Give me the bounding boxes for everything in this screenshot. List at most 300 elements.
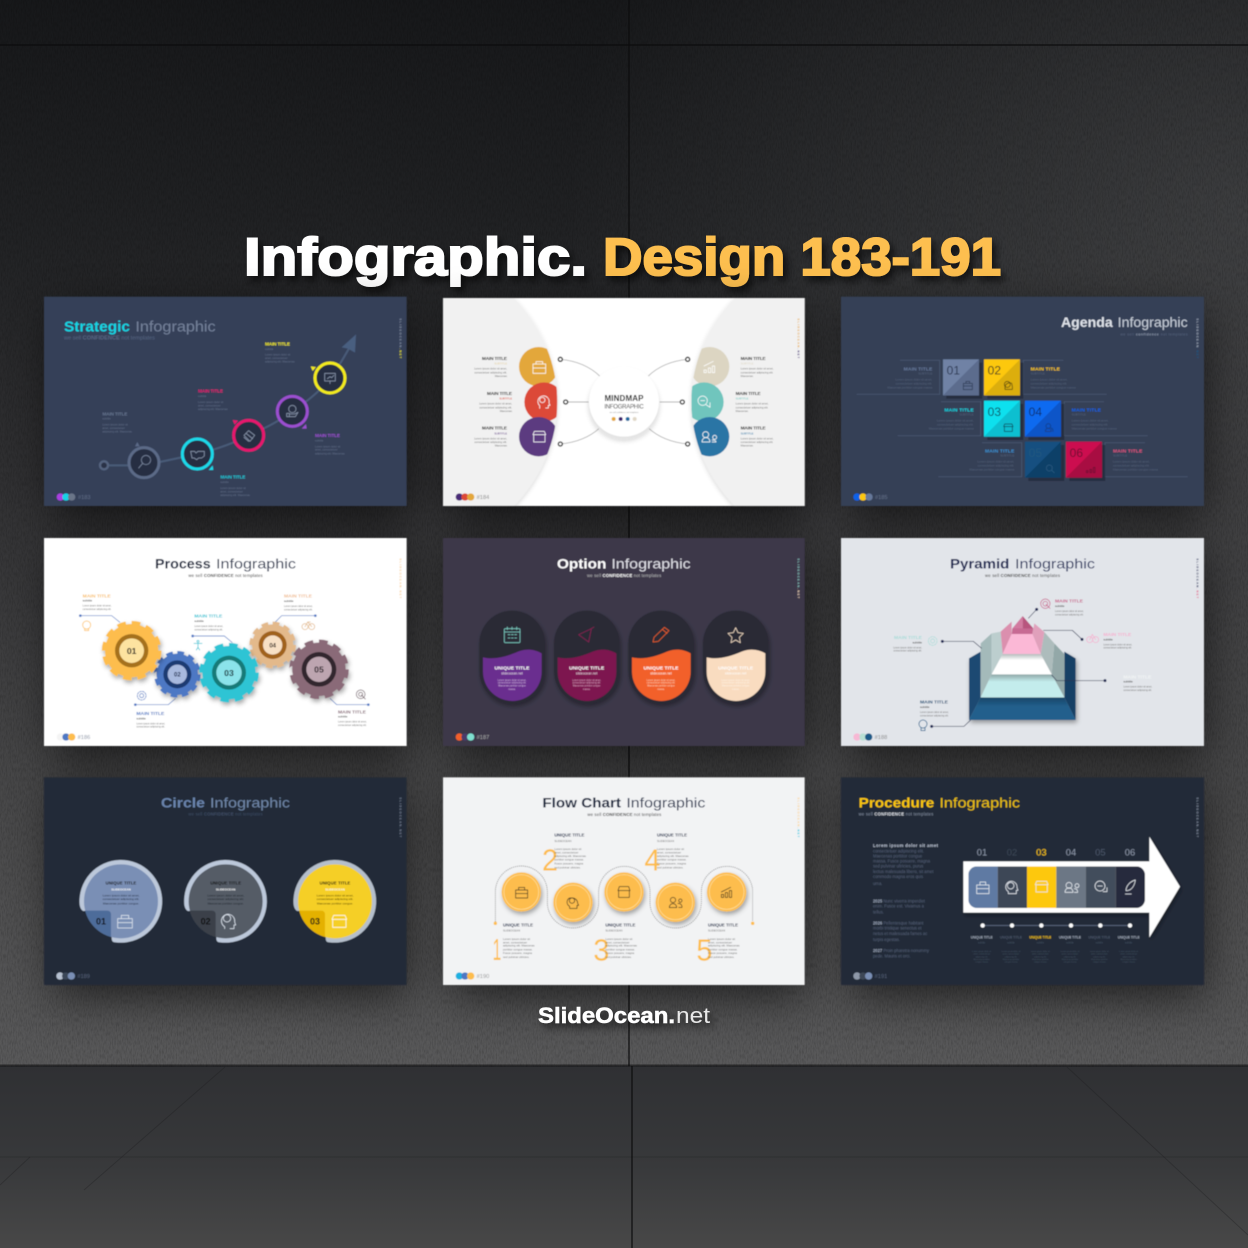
right labels: Lorem ipsum dolor sit amet, bbox=[736, 402, 769, 406]
text: step 4: SLIDEOCEAN bbox=[657, 839, 674, 843]
label 05: Lorem ipsum dolor sit amet, bbox=[978, 459, 1014, 463]
left labels: Maecenas bbox=[495, 444, 508, 448]
card 2 maroon bbox=[554, 611, 620, 704]
square 04 bbox=[1025, 401, 1064, 440]
label 01: MAIN TITLE bbox=[904, 366, 933, 372]
heading: procedure bbox=[859, 795, 1020, 817]
label 02 bbox=[136, 711, 165, 729]
left labels: Lorem ipsum dolor sit amet, bbox=[479, 402, 512, 406]
step labels: amet, consectetuer bbox=[973, 953, 990, 956]
heading: pyramid bbox=[950, 556, 1095, 578]
step labels bbox=[971, 936, 1140, 964]
centre circle: we sell confidence not templates bbox=[610, 411, 638, 414]
label blue: Lorem ipsum dolor sit amet, bbox=[920, 711, 949, 714]
label pink bbox=[1103, 632, 1132, 650]
left labels: MAIN TITLE bbox=[482, 356, 507, 361]
heading: circle: Infographic bbox=[210, 795, 290, 811]
label pink: consectetuer adipiscing elit. bbox=[1103, 647, 1132, 650]
left labels: consectetuer adipiscing elit. bbox=[479, 405, 512, 409]
label 02 bbox=[1031, 366, 1076, 390]
step labels: adipiscing elit. bbox=[975, 955, 988, 958]
heading: strategic bbox=[63, 319, 216, 341]
card 1 purple: Maecenas porttitor congue bbox=[498, 684, 526, 687]
side label: SLIDEOCEAN .NET bbox=[399, 318, 403, 359]
gear 03 bbox=[202, 646, 256, 699]
gear 03: 03 bbox=[224, 668, 234, 678]
card 3 orange: Maecenas porttitor congue bbox=[647, 684, 675, 687]
square 05 bbox=[1025, 442, 1064, 481]
label 01: consectetuer adipiscing elit. bbox=[896, 381, 932, 385]
label aqua bbox=[893, 635, 923, 653]
right circles bbox=[690, 346, 730, 457]
step labels: adipiscing elit. bbox=[1064, 955, 1077, 958]
side label: SLIDEOCEAN.NET bbox=[399, 558, 403, 599]
text: step 1: MAIN TITLE bbox=[102, 411, 127, 416]
text: step 2: sed pulvinar ultricies. bbox=[554, 865, 581, 869]
pyramid top bbox=[1012, 616, 1033, 634]
circle card 02: UNIQUE TITLE bbox=[210, 881, 241, 886]
text: step 1 bbox=[503, 922, 535, 959]
text: step 2: Fusce posuere, magna bbox=[554, 861, 584, 865]
text: step 3: adipiscing elit. Maecenas bbox=[198, 407, 228, 411]
circle card 03 bbox=[293, 860, 376, 943]
heading: option: Infographic bbox=[611, 556, 691, 572]
label top: consectetuer adipiscing elit. bbox=[1055, 613, 1084, 616]
text: step 5: SLIDEOCEAN bbox=[708, 929, 725, 933]
main title: Design 183-191 bbox=[603, 228, 1001, 287]
panel: option infographic 187 bbox=[443, 538, 805, 746]
legend 189 bbox=[56, 972, 90, 980]
label 06: MAIN TITLE bbox=[1113, 448, 1143, 454]
card 3 orange: UNIQUE TITLE bbox=[643, 665, 679, 671]
circle card 01: consectetuer adipiscing elit. bbox=[103, 897, 139, 901]
step numbers bbox=[977, 848, 1135, 858]
heading: flow chart: we sell CONFIDENCE not templates bbox=[587, 812, 661, 817]
text: step 1: adipiscing elit. Maecenas bbox=[503, 944, 535, 948]
heading: pyramid: we sell CONFIDENCE not templates bbox=[985, 573, 1060, 578]
text: step 3: adipiscing elit. Maecenas bbox=[605, 944, 638, 948]
label 01: consectetuer adipiscing elit. bbox=[83, 608, 112, 611]
label top bbox=[1055, 599, 1084, 616]
footer brand: SlideOcean. bbox=[538, 1003, 675, 1028]
left labels: SUBTITLE bbox=[494, 431, 507, 435]
label 04 bbox=[1072, 407, 1117, 431]
step labels: Lorem ipsum dolor sit bbox=[1119, 950, 1139, 953]
gear 05: 05 bbox=[314, 665, 324, 675]
step labels: amet, consectetuer bbox=[1003, 953, 1020, 956]
panel: process infographic 186 bbox=[44, 538, 407, 746]
label 01: Lorem ipsum dolor sit amet, bbox=[83, 605, 112, 608]
text: step 5: MAIN TITLE bbox=[265, 342, 290, 347]
label top: subtitle bbox=[1055, 604, 1065, 608]
icon: bulb bbox=[919, 720, 927, 731]
card 1 purple bbox=[479, 611, 545, 704]
step 2 node bbox=[182, 439, 212, 469]
label 03: Lorem ipsum dolor sit amet, bbox=[194, 625, 223, 628]
label 06: consectetuer adipiscing elit. bbox=[1113, 463, 1150, 467]
text: step 5 bbox=[265, 342, 295, 364]
text: step 2: SLIDEOCEAN bbox=[554, 839, 572, 843]
text: step 3 bbox=[605, 922, 638, 959]
step labels: amet, consectetuer bbox=[1062, 953, 1079, 956]
text: step 1: Lorem ipsum dolor sit bbox=[503, 937, 530, 941]
label 01: SUBTITLE bbox=[918, 372, 932, 376]
side label: SLIDEOCEAN.NET bbox=[399, 797, 403, 838]
label 05: MAIN TITLE bbox=[985, 448, 1015, 454]
card 4 peach: Maecenas porttitor congue bbox=[722, 684, 750, 687]
leader lines bbox=[932, 609, 1105, 726]
card 1 purple: massa. bbox=[508, 689, 516, 691]
label blue: consectetuer adipiscing elit. bbox=[920, 714, 949, 717]
gear 05 bbox=[292, 643, 346, 696]
legend 190 bbox=[456, 972, 489, 980]
text: step 3: sed pulvinar ultricies. bbox=[605, 955, 632, 959]
step labels: Maecenas porttitor bbox=[1120, 958, 1137, 961]
left circles bbox=[519, 347, 564, 456]
step labels: Maecenas porttitor bbox=[1062, 958, 1079, 961]
left labels: Maecenas bbox=[495, 374, 508, 378]
icons bbox=[533, 361, 717, 442]
text: step 2: subtitle bbox=[220, 480, 229, 484]
label 04: consectetuer adipiscing elit. bbox=[1072, 422, 1108, 426]
label blue: subtitle bbox=[920, 705, 930, 709]
label 06: Maecenas porttitor congue massa bbox=[1113, 468, 1158, 472]
label 02: consectetuer adipiscing elit. bbox=[136, 726, 165, 729]
card 2 maroon: slideocean.net bbox=[576, 672, 597, 676]
gear 02 bbox=[157, 654, 198, 695]
icon: bike bbox=[302, 622, 315, 630]
heading: strategic: Strategic bbox=[64, 319, 130, 335]
circle card 03: SLIDEOCEAN bbox=[325, 887, 345, 891]
large numbers: 5 bbox=[696, 933, 712, 967]
card 1 purple: Lorem ipsum dolor sit amet, bbox=[498, 679, 527, 682]
label 03: Lorem ipsum dolor sit amet, bbox=[937, 418, 974, 422]
text: step 4: Lorem ipsum dolor sit bbox=[315, 444, 341, 448]
text: step 2: Lorem ipsum dolor sit bbox=[220, 486, 246, 490]
text: step 4 bbox=[657, 833, 689, 869]
side label: SLIDEOCEAN .NET bbox=[797, 797, 801, 838]
card 2 maroon: consectetuer adipiscing elit. bbox=[572, 682, 601, 685]
legend 187 bbox=[456, 733, 489, 741]
card 1 purple: UNIQUE TITLE bbox=[494, 665, 530, 671]
text: step 3 bbox=[198, 389, 228, 411]
centre circle: INFOGRAPHIC bbox=[604, 405, 644, 411]
text: step 1: subtitle bbox=[102, 417, 111, 421]
legend 185 bbox=[853, 493, 888, 501]
label 02: SUBTITLE bbox=[1031, 372, 1045, 376]
label 04: consectetuer adipiscing elit. bbox=[284, 608, 313, 611]
text: step 3: Lorem ipsum dolor sit bbox=[198, 400, 224, 404]
legend 183 bbox=[57, 493, 91, 501]
timeline bbox=[980, 923, 1132, 928]
label 05: subtitle bbox=[338, 715, 348, 719]
intro text: morbi tristique senectus et bbox=[873, 926, 922, 931]
heading: option: we sell CONFIDENCE not templates bbox=[587, 573, 661, 578]
step labels: UNIQUE TITLE bbox=[1000, 936, 1022, 940]
step labels: congue massa bbox=[1064, 962, 1077, 964]
circle card 03: UNIQUE TITLE bbox=[320, 881, 351, 886]
circle card 01: SLIDEOCEAN bbox=[111, 887, 131, 891]
heading: agenda: we sell confidence not templates bbox=[1120, 332, 1188, 336]
legend 190: #190 bbox=[477, 974, 489, 980]
label white bbox=[1123, 674, 1152, 692]
text: step 1: sed pulvinar ultricies. bbox=[503, 955, 530, 959]
large numbers: 3 bbox=[593, 933, 609, 967]
step labels: UNIQUE TITLE bbox=[1029, 936, 1051, 940]
label 03: SUBTITLE bbox=[959, 413, 974, 417]
legend 183: #183 bbox=[78, 495, 91, 501]
bracket lines bbox=[857, 360, 1188, 477]
left labels: Lorem ipsum dolor sit amet, bbox=[474, 436, 507, 440]
step numbers: 02 bbox=[1007, 848, 1017, 858]
card 3 orange: massa. bbox=[657, 689, 665, 691]
legend 185: #185 bbox=[875, 495, 888, 501]
label 06 bbox=[1113, 448, 1158, 472]
text: step 5: sed pulvinar ultricies. bbox=[708, 955, 735, 959]
heading: circle: we sell CONFIDENCE not templates bbox=[188, 812, 263, 817]
icon: gear bbox=[137, 691, 146, 700]
label top: Lorem ipsum dolor sit amet, bbox=[1055, 610, 1084, 613]
label blue bbox=[920, 700, 949, 717]
text: step 5: amet, consectetuer bbox=[708, 940, 732, 944]
card 3 orange bbox=[628, 611, 694, 704]
circle card 02 bbox=[184, 860, 267, 943]
left labels bbox=[474, 356, 513, 448]
step labels: amet, consectetuer bbox=[1091, 953, 1108, 956]
text: step 3: Lorem ipsum dolor sit bbox=[605, 937, 633, 941]
label 05: consectetuer adipiscing elit. bbox=[338, 724, 367, 727]
step labels: subtitle bbox=[1125, 941, 1133, 944]
label 04: MAIN TITLE bbox=[1072, 407, 1102, 413]
label 03: MAIN TITLE bbox=[944, 407, 974, 413]
right labels: consectetuer adipiscing elit. bbox=[736, 405, 769, 409]
circle card 01 bbox=[79, 860, 162, 943]
main title bbox=[244, 228, 1001, 287]
large numbers: 1 bbox=[493, 933, 501, 967]
circle card 01: Maecenas porttitor congue. bbox=[103, 901, 139, 905]
heading: pyramid: Pyramid bbox=[950, 556, 1009, 572]
step labels: Maecenas porttitor bbox=[973, 958, 990, 961]
intro text: 2025 Nunc viverra imperdiet bbox=[873, 898, 926, 903]
card 3 orange: slideocean.net bbox=[650, 672, 672, 676]
square 02: 02 bbox=[988, 364, 1001, 378]
heading: flow chart: Flow Chart bbox=[542, 795, 621, 811]
step labels: congue massa bbox=[1093, 962, 1107, 964]
heading: strategic: Infographic bbox=[135, 319, 216, 335]
intro text: massa. Fusce posuere, magna bbox=[873, 859, 931, 864]
step labels: Lorem ipsum dolor sit bbox=[1031, 950, 1050, 953]
text: step 2 bbox=[220, 475, 251, 497]
path end dots bbox=[494, 922, 754, 925]
label white: consectetuer adipiscing elit. bbox=[1123, 689, 1152, 692]
label 02: Lorem ipsum dolor sit amet, bbox=[1031, 377, 1068, 381]
circle card 03: consectetuer adipiscing elit. bbox=[317, 897, 353, 901]
intro text: enim. Fusce est. Vivamus a bbox=[873, 904, 925, 909]
step labels: adipiscing elit. bbox=[1093, 955, 1106, 958]
text: step 1: amet, consectetuer bbox=[503, 940, 527, 944]
step labels: Lorem ipsum dolor sit bbox=[1090, 950, 1109, 953]
heading: agenda: Agenda bbox=[1061, 314, 1113, 330]
heading: procedure: we sell CONFIDENCE not templates bbox=[859, 812, 933, 817]
text: step 3: MAIN TITLE bbox=[198, 389, 223, 394]
square 06: 06 bbox=[1070, 446, 1083, 460]
label pink: MAIN TITLE bbox=[1103, 632, 1132, 638]
label 02: MAIN TITLE bbox=[1031, 366, 1061, 372]
label 03: subtitle bbox=[194, 619, 204, 623]
right labels: Lorem ipsum dolor sit amet, bbox=[741, 436, 774, 440]
right labels: MAIN TITLE bbox=[741, 426, 766, 431]
text: step 5: adipiscing elit. Maecenas bbox=[265, 360, 295, 364]
legend 186 bbox=[57, 733, 90, 741]
label 05: MAIN TITLE bbox=[338, 709, 367, 715]
slide shadows bbox=[54, 312, 1204, 996]
text: step 4: subtitle bbox=[315, 438, 324, 442]
heading: flow chart bbox=[542, 795, 705, 817]
label blue: MAIN TITLE bbox=[920, 700, 949, 706]
legend 191: #191 bbox=[875, 974, 887, 980]
card 2 maroon: Lorem ipsum dolor sit amet, bbox=[572, 679, 601, 682]
label 05: Maecenas porttitor congue massa bbox=[969, 468, 1015, 472]
label 05 bbox=[969, 448, 1015, 472]
heading: agenda: Infographic bbox=[1118, 314, 1188, 330]
intro text: sed pulvinar ultricies, purus bbox=[873, 864, 923, 869]
large numbers bbox=[493, 843, 712, 967]
right labels: Maecenas bbox=[741, 444, 754, 448]
text: step 5 bbox=[708, 922, 740, 959]
heading: process bbox=[155, 556, 296, 578]
heading: flow chart: Infographic bbox=[626, 795, 705, 811]
card 2 maroon: massa. bbox=[583, 689, 591, 691]
text: step 2: UNIQUE TITLE bbox=[554, 833, 584, 838]
panel: agenda infographic 185 bbox=[841, 297, 1204, 506]
step labels: Lorem ipsum dolor sit bbox=[972, 950, 992, 953]
gear 02: 02 bbox=[174, 673, 181, 679]
step labels: amet, consectetuer bbox=[1120, 953, 1137, 956]
gear 04 bbox=[252, 624, 293, 666]
icon: target bbox=[356, 690, 365, 699]
left labels: SUBTITLE bbox=[499, 397, 512, 401]
connector nodes bbox=[558, 357, 690, 446]
text: step 2: adipiscing elit. Maecenas bbox=[554, 854, 587, 858]
inner circle rings bbox=[504, 875, 744, 920]
text: step 4: adipiscing elit. Maecenas bbox=[657, 854, 689, 858]
intro text: turpis egestas. bbox=[873, 937, 900, 942]
label 01 bbox=[887, 366, 933, 390]
step labels: Maecenas porttitor bbox=[1091, 958, 1108, 961]
label 05 bbox=[338, 709, 367, 727]
text: step 5: porttitor congue massa. bbox=[708, 947, 738, 951]
circle card 02: 02 bbox=[201, 916, 211, 926]
label aqua: MAIN TITLE bbox=[894, 635, 923, 641]
heading: option: Option bbox=[557, 556, 606, 572]
step labels: congue massa bbox=[1005, 962, 1018, 964]
label pink: subtitle bbox=[1103, 637, 1113, 641]
text: step 4: Lorem ipsum dolor sit bbox=[657, 847, 684, 851]
text: step 3: UNIQUE TITLE bbox=[605, 922, 635, 927]
label 01: MAIN TITLE bbox=[83, 593, 111, 599]
gear 01 bbox=[105, 624, 158, 677]
step labels: adipiscing elit. bbox=[1034, 955, 1047, 958]
left labels: consectetuer adipiscing elit. bbox=[474, 440, 507, 444]
label 04: subtitle bbox=[284, 599, 294, 603]
text: step 3: amet, consectetuer bbox=[198, 403, 221, 407]
label pink: Lorem ipsum dolor sit amet, bbox=[1103, 643, 1132, 646]
legend 191 bbox=[853, 972, 887, 980]
large numbers: 2 bbox=[542, 843, 558, 877]
heading: strategic: we sell CONFIDENCE not templates bbox=[63, 335, 155, 341]
step labels: Maecenas porttitor bbox=[1032, 958, 1049, 961]
left labels: MAIN TITLE bbox=[482, 426, 507, 431]
heading: option bbox=[557, 556, 691, 578]
text: step 3: subtitle bbox=[198, 394, 207, 398]
intro text: lectus malesuada libero, sit amet bbox=[873, 869, 934, 874]
icon: figure bbox=[194, 640, 202, 650]
legend 186: #186 bbox=[78, 735, 90, 741]
left labels: Lorem ipsum dolor sit amet, bbox=[474, 367, 507, 371]
heading: process: Process bbox=[155, 556, 211, 572]
intro text: Maecenas porttitor congue bbox=[873, 854, 923, 859]
card 4 peach: massa. bbox=[732, 689, 740, 691]
label white: Lorem ipsum dolor sit amet, bbox=[1123, 686, 1152, 689]
card 3 orange: Lorem ipsum dolor sit amet, bbox=[647, 679, 676, 682]
side label: SLIDEOCEAN .NET bbox=[1195, 318, 1199, 359]
pyramid level 4 pink bbox=[1001, 622, 1044, 654]
label white: subtitle bbox=[1123, 680, 1133, 684]
step 4 node bbox=[277, 396, 307, 426]
square 03 bbox=[984, 401, 1023, 440]
square 05: 05 bbox=[1029, 446, 1042, 460]
text: step 1: UNIQUE TITLE bbox=[503, 922, 533, 927]
step numbers: 01 bbox=[977, 848, 987, 858]
heading: process: Infographic bbox=[216, 556, 296, 572]
text: step 3: SLIDEOCEAN bbox=[605, 929, 623, 933]
leader dots bbox=[79, 614, 370, 706]
step labels: amet, consectetuer bbox=[1032, 953, 1049, 956]
label 01: Lorem ipsum dolor sit amet, bbox=[896, 377, 932, 381]
text: step 4 bbox=[315, 433, 345, 455]
text: step 5: Lorem ipsum dolor sit bbox=[708, 937, 735, 941]
card 2 maroon: Maecenas porttitor congue bbox=[573, 684, 601, 687]
text: step 5: Lorem ipsum dolor sit bbox=[265, 353, 291, 357]
text: step 4: adipiscing elit. Maecenas bbox=[315, 451, 345, 455]
legend 184 bbox=[456, 493, 489, 501]
leader dots bbox=[930, 608, 1106, 728]
step numbers: 04 bbox=[1066, 848, 1076, 858]
label 02: subtitle bbox=[136, 716, 146, 720]
step 5 node bbox=[315, 363, 345, 393]
text: step 3: porttitor congue massa. bbox=[605, 947, 635, 951]
step labels: subtitle bbox=[978, 941, 986, 944]
centre circle: MINDMAP bbox=[604, 394, 644, 403]
text: step 4: Fusce posuere, magna bbox=[657, 861, 686, 865]
text: step 1: adipiscing elit. Maecenas bbox=[102, 430, 133, 434]
panel: flow chart infographic 190 bbox=[443, 777, 805, 985]
intro text: 2027 Proin pharetra nonummy bbox=[873, 948, 930, 953]
side shapes bbox=[443, 298, 805, 506]
circle card 02: consectetuer adipiscing elit. bbox=[207, 897, 244, 901]
step labels: UNIQUE TITLE bbox=[1059, 936, 1081, 940]
step labels: Maecenas porttitor bbox=[1003, 958, 1020, 961]
text: step 2 bbox=[554, 833, 587, 869]
flow icons bbox=[516, 887, 732, 908]
left labels: MAIN TITLE bbox=[487, 391, 512, 396]
label 05: SUBTITLE bbox=[1000, 454, 1014, 458]
text: step 3: Fusce posuere, magna bbox=[605, 951, 635, 955]
label aqua: consectetuer adipiscing elit. bbox=[893, 650, 922, 653]
label 04: SUBTITLE bbox=[1072, 413, 1086, 417]
large numbers: 4 bbox=[644, 843, 660, 877]
pyramid level 2 aqua bbox=[981, 633, 1064, 697]
